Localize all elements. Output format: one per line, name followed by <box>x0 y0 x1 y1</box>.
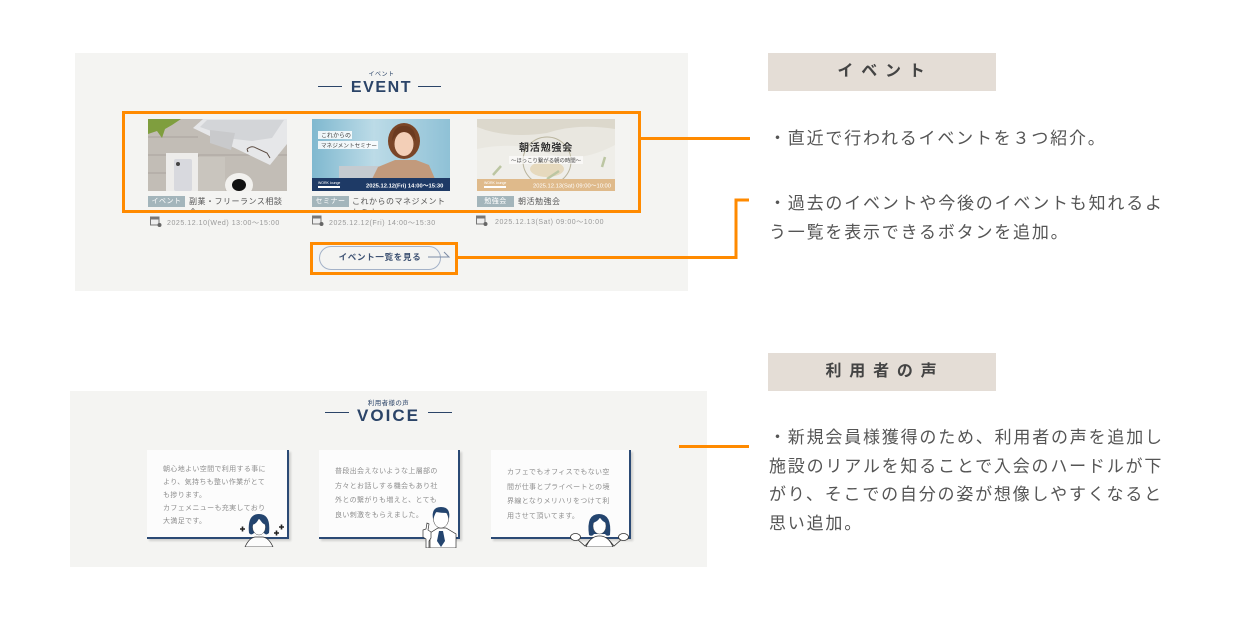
voice heading rule right <box>428 412 452 413</box>
event heading rule left <box>318 86 342 87</box>
panel: voice section screenshot <box>70 391 707 567</box>
view all events button <box>319 246 441 270</box>
event card 3 photo: morning study banner <box>477 119 615 191</box>
voice card 2 text: 良い刺激をもらえました。 <box>335 512 423 518</box>
voice card 3 <box>491 450 631 539</box>
event card 2 date icon <box>312 216 324 226</box>
voice small heading: 利用者様の声 <box>368 400 409 407</box>
heading: event: イベント <box>837 63 933 80</box>
event card 1 date: 2025.12.10(Wed) 13:00〜15:00 <box>167 220 280 227</box>
voice card 1 text: 朝心地よい空間で利用する事に <box>163 466 266 473</box>
voice card 1 text: より、気持ちも整い作業がとて <box>163 479 265 486</box>
event card 1 date icon <box>150 216 162 227</box>
connector: button to second note <box>458 198 749 259</box>
event heading rule right <box>418 86 441 87</box>
event card 1 tag: イベント <box>152 198 182 205</box>
button arrow <box>428 252 450 258</box>
voice heading rule left <box>325 412 349 413</box>
event card 2 photo: seminar banner: 2025.12.12(Fri) 14:00〜15:30 <box>366 184 443 190</box>
event small heading: イベント <box>368 72 394 78</box>
event card 2 title: これからのマネジメント <box>352 197 446 206</box>
event card 1 title: 副業・フリーランス相談 <box>189 197 282 206</box>
event card 2 title <box>352 197 446 213</box>
event card 3 title: 朝活勉強会 <box>518 197 560 206</box>
banner text: 2025.12.13(Sat) 09:00〜10:00 <box>533 184 611 190</box>
voice card 2 text: 方々とお話しする機会もあり社 <box>335 482 438 490</box>
voice card 3 text: カフェでもオフィスでもない空 <box>507 469 610 476</box>
event card 2 date: 2025.12.12(Fri) 14:00〜15:30 <box>329 220 436 227</box>
highlight box: view all button <box>310 242 458 275</box>
note: user voices: 施設のリアルを知ることで入会のハードルが下 <box>769 456 1163 476</box>
panel: event section screenshot <box>75 53 688 291</box>
voice card 1 text: 大満足です。 <box>163 518 206 525</box>
event card 1 tag <box>148 196 185 207</box>
event card 2 tag: セミナー <box>316 198 346 205</box>
voice card 3 illustration: woman with open hands <box>570 514 629 547</box>
event card 1 title <box>189 197 282 213</box>
event card 1 photo: desk with laptop <box>148 119 287 191</box>
note: event list button: う一覧を表示できるボタンを追加。 <box>769 222 1069 242</box>
heading: event <box>768 53 996 91</box>
voice card 2 text: 普段出会えないような上層部の <box>335 468 438 475</box>
event heading: EVENT <box>351 79 412 96</box>
note: event cards: ・直近で行われるイベントを３つ紹介。 <box>769 129 1107 148</box>
highlight box: event cards <box>122 111 641 213</box>
voice card 1 text: も捗ります。 <box>163 492 206 499</box>
note: event list button <box>769 194 1164 242</box>
banner text <box>484 141 611 190</box>
banner text: 朝活勉強会 <box>519 141 573 154</box>
note: user voices: がり、そこでの自分の姿が想像しやすくなると <box>769 485 1163 504</box>
voice card 2 <box>319 450 460 539</box>
note: user voices <box>769 428 1164 532</box>
voice card 3 text <box>507 468 610 520</box>
voice card 1 text: カフェメニューも充実しており <box>163 505 265 512</box>
voice card 2 text: 外との繋がりも増えと、とても <box>335 497 437 504</box>
banner text: マネジメントセミナー <box>321 142 377 150</box>
banner text: WORK lounge <box>318 181 340 185</box>
banner text: これからの <box>321 132 351 140</box>
heading: user voices: 利用者の声 <box>825 363 944 380</box>
voice card 1 <box>147 450 289 539</box>
connector: event cards to first note <box>641 137 750 140</box>
voice card 3 text: 界線となりメリハリをつけて利 <box>507 498 610 505</box>
event card 2 photo: seminar banner <box>312 119 450 191</box>
voice heading: VOICE <box>357 406 420 425</box>
voice card 1 illustration: woman with sparkles <box>240 514 284 547</box>
event card 3 tag <box>477 196 514 207</box>
banner text: 〜ほっこり繋がる朝の時間〜 <box>511 156 582 164</box>
voice card 2 illustration: man pointing <box>422 507 456 548</box>
event card 3 date icon <box>476 216 488 226</box>
banner text: WORK lounge <box>484 181 506 185</box>
voice card 1 text <box>163 465 266 525</box>
connector: voice section to note <box>679 445 749 448</box>
note: user voices: ・新規会員様獲得のため、利用者の声を追加し <box>769 428 1164 447</box>
voice card 3 text: 間が仕事とプライベートとの境 <box>507 484 610 490</box>
note: event list button: ・過去のイベントや今後のイベントも知れるよ <box>769 194 1164 213</box>
view all events button: イベント一覧を見る <box>339 252 421 262</box>
voice card 3 text: 用させて頂いてます。 <box>507 512 579 520</box>
event card 2 tag <box>312 196 349 207</box>
note: user voices: 思い追加。 <box>769 514 863 532</box>
event card 3 tag: 勉強会 <box>484 198 507 205</box>
event card 3 date: 2025.12.13(Sat) 09:00〜10:00 <box>495 219 604 226</box>
voice card 2 text <box>335 467 438 518</box>
heading: user voices <box>768 353 996 391</box>
banner text <box>318 131 378 188</box>
